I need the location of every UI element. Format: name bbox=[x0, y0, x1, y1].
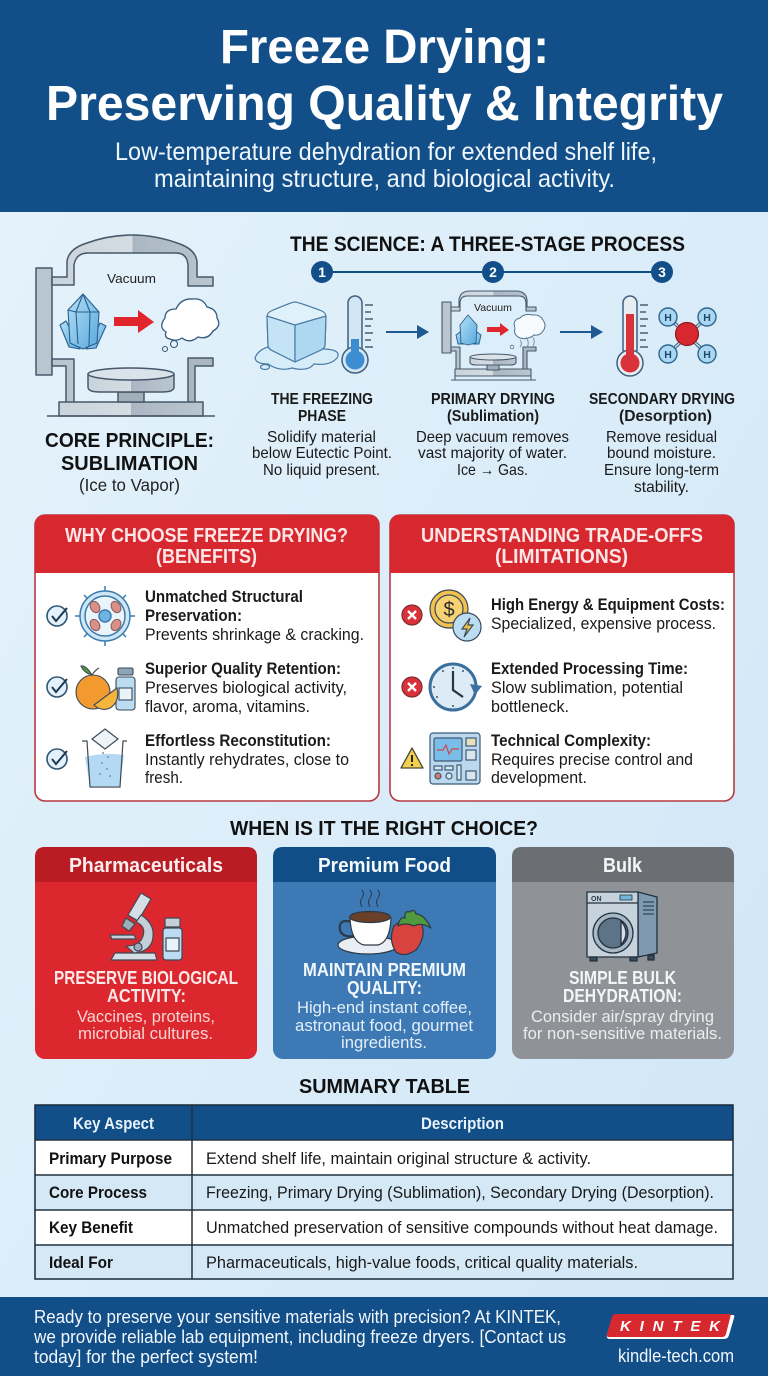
label: small vacuum: Vacuum bbox=[474, 302, 512, 314]
heading: limitations bbox=[421, 524, 703, 568]
icon: hot thermometer bbox=[617, 296, 648, 376]
card heading: ACTIVITY: bbox=[107, 986, 186, 1006]
icon: molecule: H bbox=[664, 312, 672, 324]
stage 3 text: Ensure long-term bbox=[604, 462, 719, 479]
logo: kintek: KINTEK bbox=[620, 1318, 721, 1335]
heading: benefits bbox=[65, 524, 348, 568]
stage 1 text: No liquid present. bbox=[263, 462, 380, 479]
icon: washer dryer: ON bbox=[591, 896, 602, 903]
icon: cold thermometer bbox=[342, 296, 373, 373]
icon: small vacuum chamber bbox=[442, 291, 536, 380]
table descriptions: Extend shelf life, maintain original structure & activity. bbox=[206, 1150, 591, 1168]
card heading: SIMPLE BULK bbox=[569, 968, 676, 988]
heading: core principle: SUBLIMATION bbox=[61, 453, 198, 475]
stage 1 text: THE FREEZING bbox=[271, 391, 373, 408]
stage 2 text: vast majority of water. bbox=[418, 445, 567, 462]
stage 1 text bbox=[252, 391, 392, 479]
heading: right choice: WHEN IS IT THE RIGHT CHOICE? bbox=[230, 818, 538, 840]
timeline: 3 bbox=[658, 264, 666, 280]
table descriptions: Pharmaceuticals, high-value foods, critical quality materials. bbox=[206, 1254, 638, 1272]
panel: limitations bbox=[390, 515, 734, 801]
benefit 1 text bbox=[145, 588, 364, 644]
label: vacuum: Vacuum bbox=[107, 271, 156, 286]
heading: summary table: SUMMARY TABLE bbox=[299, 1076, 470, 1098]
heading: core principle bbox=[45, 430, 214, 475]
limitation 3 text: Requires precise control and bbox=[491, 751, 693, 769]
stage 1 text: PHASE bbox=[298, 408, 346, 425]
benefit 3 text: Effortless Reconstitution: bbox=[145, 732, 331, 750]
icon: cell bbox=[75, 586, 135, 646]
stage 2 text: Deep vacuum removes bbox=[416, 429, 569, 446]
heading: core principle: CORE PRINCIPLE: bbox=[45, 430, 214, 452]
timeline: 2 bbox=[489, 264, 497, 280]
table header bbox=[73, 1115, 504, 1133]
arrow: small red bbox=[487, 323, 509, 336]
title bbox=[46, 21, 723, 131]
limitation 1 text: Specialized, expensive process. bbox=[491, 615, 716, 633]
call to action: today] for the perfect system! bbox=[34, 1347, 258, 1367]
table row labels: Key Benefit bbox=[49, 1219, 133, 1237]
panel: three-stage process bbox=[252, 233, 735, 496]
icon: coin and energy bbox=[430, 590, 481, 641]
icon: washer dryer bbox=[587, 892, 657, 961]
stage 1 text: Solidify material bbox=[267, 429, 376, 446]
card heading bbox=[303, 960, 466, 998]
title: Preserving Quality & Integrity bbox=[46, 77, 723, 131]
limitation 1 text: High Energy & Equipment Costs: bbox=[491, 596, 725, 614]
stage 2 text bbox=[416, 391, 569, 479]
caption: ice to vapor: (Ice to Vapor) bbox=[79, 475, 180, 495]
icon: ice crystal bbox=[60, 294, 106, 349]
subtitle bbox=[115, 138, 657, 193]
warning icons bbox=[401, 605, 423, 768]
table header: Description bbox=[421, 1115, 504, 1133]
heading: benefits: (BENEFITS) bbox=[156, 545, 257, 568]
arrow: stage 1 to 2 bbox=[386, 325, 429, 339]
benefit 2 text: Preserves biological activity, bbox=[145, 679, 347, 697]
footer bbox=[0, 1297, 768, 1376]
card title: Pharmaceuticals bbox=[69, 855, 223, 877]
card text: High-end instant coffee, bbox=[297, 999, 472, 1017]
card title: Bulk bbox=[603, 855, 643, 877]
card text: for non-sensitive materials. bbox=[523, 1025, 722, 1043]
arrow: sublimation bbox=[114, 310, 154, 333]
card heading: PRESERVE BIOLOGICAL bbox=[54, 968, 238, 988]
stage 3 text: Remove residual bbox=[606, 429, 717, 446]
stage 3 text: SECONDARY DRYING bbox=[589, 391, 735, 408]
card: pharmaceuticals bbox=[35, 847, 257, 1059]
heading: the science: THE SCIENCE: A THREE-STAGE PROCESS bbox=[290, 233, 685, 256]
benefit 2 text: Superior Quality Retention: bbox=[145, 660, 341, 678]
icon: coffee and strawberry bbox=[338, 890, 431, 955]
table descriptions: Freezing, Primary Drying (Sublimation), Secondary Drying (Desorption). bbox=[206, 1184, 714, 1202]
stage 3 text: stability. bbox=[634, 479, 689, 496]
header banner bbox=[0, 0, 768, 212]
card heading: DEHYDRATION: bbox=[563, 986, 682, 1006]
card heading: QUALITY: bbox=[347, 978, 422, 998]
subtitle: maintaining structure, and biological activity. bbox=[154, 165, 615, 193]
icon: vacuum chamber bbox=[36, 235, 215, 416]
stage 3 text: bound moisture. bbox=[607, 445, 716, 462]
limitation 1 text bbox=[491, 596, 725, 633]
table row labels: Primary Purpose bbox=[49, 1150, 172, 1168]
heading: limitations: (LIMITATIONS) bbox=[495, 545, 628, 568]
icon: control panel bbox=[430, 733, 480, 784]
table row labels bbox=[49, 1150, 172, 1272]
limitation 2 text: Slow sublimation, potential bbox=[491, 679, 683, 697]
benefit 1 text: Preservation: bbox=[145, 607, 242, 625]
icon: small vapor bbox=[510, 314, 545, 349]
limitation 3 text bbox=[491, 732, 693, 787]
card heading: MAINTAIN PREMIUM bbox=[303, 960, 466, 980]
heading: limitations: UNDERSTANDING TRADE-OFFS bbox=[421, 524, 703, 547]
card text: Consider air/spray drying bbox=[531, 1008, 714, 1026]
call to action bbox=[33, 1307, 566, 1367]
limitation 2 text: bottleneck. bbox=[491, 698, 569, 716]
subtitle: Low-temperature dehydration for extended shelf life, bbox=[115, 138, 657, 166]
title: Freeze Drying: bbox=[220, 21, 549, 74]
icon: glass and powder bbox=[82, 729, 127, 787]
benefit 1 text: Prevents shrinkage & cracking. bbox=[145, 626, 364, 644]
stage 2 text: PRIMARY DRYING bbox=[431, 391, 555, 408]
card text: microbial cultures. bbox=[78, 1025, 213, 1043]
summary table bbox=[35, 1105, 733, 1279]
panel: core principle bbox=[36, 235, 219, 495]
card text: ingredients. bbox=[341, 1034, 427, 1052]
card title: Premium Food bbox=[318, 855, 451, 877]
table descriptions: Unmatched preservation of sensitive compounds without heat damage. bbox=[206, 1219, 718, 1237]
icon: molecule bbox=[659, 308, 716, 363]
icon: coin and energy: $ bbox=[443, 599, 455, 621]
panel: benefits bbox=[35, 515, 379, 801]
stage 2 text: Ice → Gas. bbox=[457, 462, 528, 479]
table header: Key Aspect bbox=[73, 1115, 154, 1133]
call to action: we provide reliable lab equipment, including freeze dryers. [Contact us bbox=[33, 1327, 566, 1347]
icon: orange and bottle bbox=[76, 666, 135, 710]
card text: astronaut food, gourmet bbox=[295, 1017, 473, 1035]
icon: molecule: H bbox=[703, 312, 711, 324]
table row labels: Ideal For bbox=[49, 1254, 114, 1272]
check icons bbox=[47, 606, 67, 769]
benefit 1 text: Unmatched Structural bbox=[145, 588, 303, 606]
stage 3 text bbox=[589, 391, 735, 496]
card heading bbox=[563, 968, 682, 1006]
stage 2 text: (Sublimation) bbox=[447, 408, 539, 425]
icon: ice cube bbox=[255, 302, 338, 370]
icon: small crystal bbox=[456, 315, 481, 345]
stage 3 text: (Desorption) bbox=[619, 408, 712, 425]
card text: Vaccines, proteins, bbox=[77, 1008, 215, 1026]
benefit 2 text: flavor, aroma, vitamins. bbox=[145, 698, 310, 716]
benefit 3 text bbox=[145, 732, 349, 787]
icon: vapor cloud bbox=[162, 299, 219, 352]
benefit 3 text: fresh. bbox=[145, 769, 183, 787]
heading: benefits: WHY CHOOSE FREEZE DRYING? bbox=[65, 524, 348, 547]
limitation 2 text bbox=[491, 660, 688, 716]
card text bbox=[523, 1008, 722, 1043]
icon: clock bbox=[430, 664, 482, 710]
timeline bbox=[311, 261, 673, 283]
timeline: 1 bbox=[318, 264, 326, 280]
icon: molecule: H bbox=[703, 349, 711, 361]
logo: kintek bbox=[607, 1314, 734, 1339]
stage 1 text: below Eutectic Point. bbox=[252, 445, 392, 462]
card text bbox=[77, 1008, 215, 1043]
table descriptions bbox=[206, 1150, 718, 1272]
table row labels: Core Process bbox=[49, 1184, 147, 1202]
benefit 2 text bbox=[145, 660, 347, 716]
limitation 3 text: Technical Complexity: bbox=[491, 732, 651, 750]
card text bbox=[295, 999, 473, 1052]
benefit 3 text: Instantly rehydrates, close to bbox=[145, 751, 349, 769]
icon: microscope and vial bbox=[110, 893, 182, 960]
card: bulk bbox=[512, 847, 734, 1059]
icon: molecule: H bbox=[664, 349, 672, 361]
limitation 2 text: Extended Processing Time: bbox=[491, 660, 688, 678]
website: kindle-tech.com bbox=[618, 1346, 734, 1366]
card heading bbox=[54, 968, 238, 1006]
limitation 3 text: development. bbox=[491, 769, 587, 787]
call to action: Ready to preserve your sensitive materials with precision? At KINTEK, bbox=[34, 1307, 561, 1327]
card: premium food bbox=[273, 847, 496, 1059]
arrow: stage 2 to 3 bbox=[560, 325, 603, 339]
